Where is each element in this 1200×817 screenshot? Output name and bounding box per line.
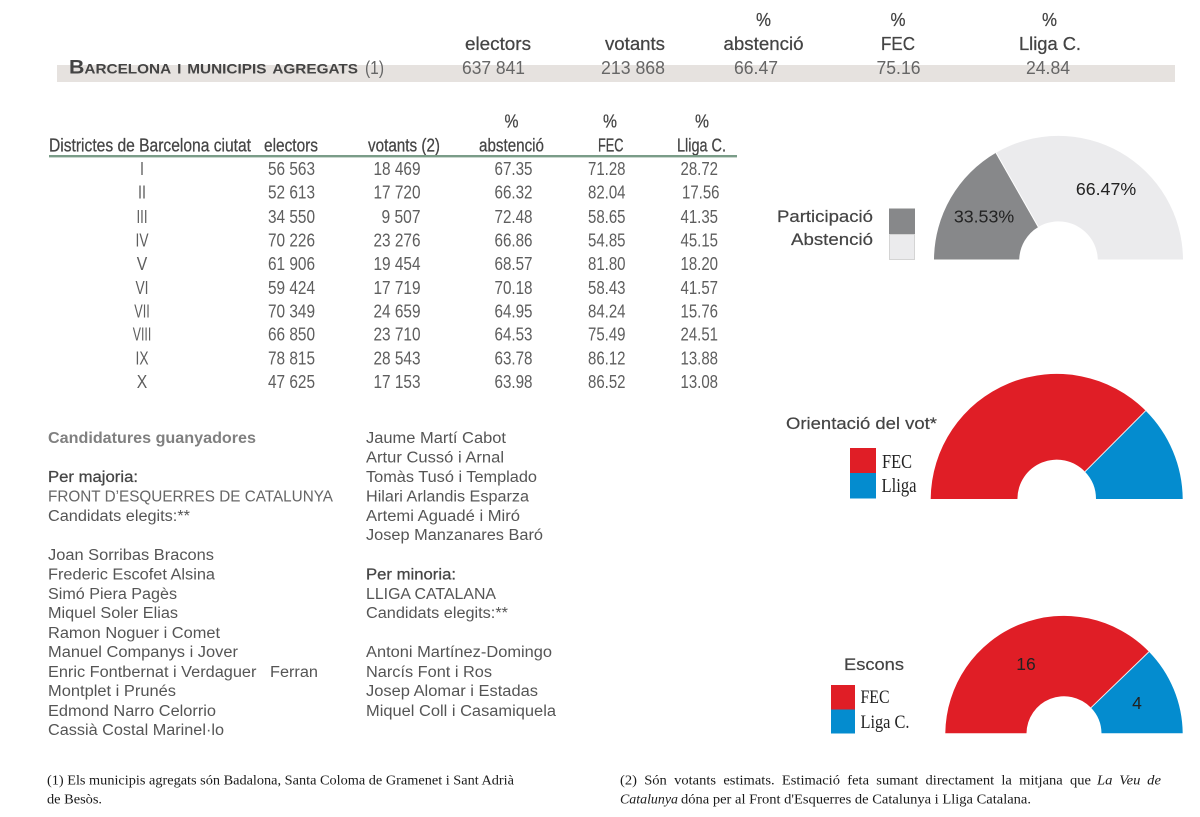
- table rows: II: [138, 182, 146, 202]
- table rows: 67.35: [494, 159, 532, 179]
- table header: votants (2): [368, 136, 440, 156]
- footnote 1: [47, 774, 515, 808]
- text block: winning candidates, right column: Tomàs Tusó i Templado: [366, 469, 537, 486]
- text block: winning candidates, left column: Cassià Costal Marinel·lo: [48, 722, 224, 739]
- table rows: IV: [136, 230, 148, 250]
- table rows: 70 226: [268, 230, 315, 250]
- table rows: 58.43: [588, 278, 626, 298]
- text block: winning candidates, left column: Per majoria:: [48, 469, 138, 486]
- summary header: Lliga C.: [1019, 34, 1081, 54]
- footnote 1: de Besòs.: [47, 792, 102, 808]
- table rows: 9 507: [382, 207, 420, 227]
- chart: vote orientation semi-donut: [931, 374, 1183, 499]
- legend: seats: [831, 655, 910, 734]
- text block: winning candidates, left column: FRONT D’ESQUERRES DE CATALUNYA: [48, 488, 334, 506]
- table rows: 81.80: [588, 254, 626, 274]
- table header: %: [504, 112, 518, 132]
- table rows: 64.53: [494, 325, 532, 345]
- table rows: 56 563: [268, 159, 315, 179]
- table rows: 72.48: [494, 207, 532, 227]
- table rows: 66.32: [494, 182, 532, 202]
- legend: seats: Liga C.: [860, 712, 910, 733]
- table rows: 58.65: [588, 207, 626, 227]
- table rows: 17 153: [374, 372, 420, 392]
- table rows: 17 720: [374, 182, 420, 202]
- text block: winning candidates, right column: Narcís Font i Ros: [366, 664, 492, 681]
- summary header: votants: [605, 34, 665, 54]
- summary title: Barcelona i municipis agregats: [69, 56, 358, 78]
- text block: winning candidates, left column: Frederic Escofet Alsina: [48, 566, 215, 584]
- text block: winning candidates, right column: Jaume Martí Cabot: [366, 430, 507, 447]
- summary header: electors: [465, 34, 531, 54]
- table rows: 28 543: [374, 348, 420, 368]
- table header: %: [603, 112, 617, 132]
- text block: winning candidates, right column: LLIGA CATALANA: [366, 586, 497, 603]
- chart: participation semi-donut: 33.53%: [954, 206, 1014, 226]
- summary header: %: [756, 10, 771, 30]
- text block: winning candidates, left column: Montplet i Prunés: [48, 683, 176, 700]
- chart: participation semi-donut: 66.47%: [1076, 179, 1136, 199]
- table rows: 64.95: [494, 301, 532, 321]
- summary values: 75.16: [876, 58, 920, 78]
- text block: winning candidates, left column: Simó Piera Pagès: [48, 586, 177, 603]
- table rows: 23 710: [374, 325, 420, 345]
- table rows: 78 815: [268, 348, 315, 368]
- text block: winning candidates, right column: [366, 430, 556, 720]
- table rows: 68.57: [494, 254, 532, 274]
- chart: seats semi-donut: 4: [1132, 693, 1142, 713]
- table rows: VI: [136, 278, 148, 298]
- summary header: FEC: [881, 34, 915, 54]
- text block: winning candidates, left column: Joan Sorribas Bracons: [48, 547, 214, 564]
- text block: winning candidates, right column: Miquel Coll i Casamiquela: [366, 703, 556, 720]
- table rows: 84.24: [588, 301, 626, 321]
- table header: electors: [264, 136, 318, 156]
- text block: winning candidates, left column: [48, 430, 334, 739]
- table rows: 18.20: [680, 254, 718, 274]
- text block: winning candidates, right column: Antoni Martínez-Domingo: [366, 644, 552, 661]
- table rows: 23 276: [374, 230, 420, 250]
- table rows: [133, 159, 720, 392]
- legend: seats: FEC: [860, 687, 890, 708]
- table rows: 13.88: [680, 348, 718, 368]
- legend: seats: Escons: [844, 655, 904, 674]
- summary values: 66.47: [734, 58, 778, 78]
- table rows: 63.98: [494, 372, 532, 392]
- table rows: VII: [134, 301, 150, 321]
- panel: Barcelona summary: [57, 10, 1175, 82]
- table rows: 52 613: [268, 182, 315, 202]
- table rows: 17 719: [374, 278, 420, 298]
- chart: participation semi-donut: [934, 136, 1183, 260]
- summary values: (1): [365, 58, 384, 78]
- legend: participation: Participació: [777, 207, 873, 226]
- text block: winning candidates, left column: Ramon Noguer i Comet: [48, 625, 221, 642]
- table rows: 70.18: [494, 278, 532, 298]
- table rows: 63.78: [494, 348, 532, 368]
- summary values: 24.84: [1026, 58, 1070, 78]
- table rows: 13.08: [680, 372, 718, 392]
- footnote 2: dóna per al Front d'Esquerres de Catalunya i Lliga Catalana.: [681, 792, 1031, 808]
- summary header: [465, 10, 1081, 54]
- text block: winning candidates, right column: Hilari Arlandis Esparza: [366, 488, 529, 506]
- table rows: 45.15: [680, 230, 718, 250]
- table rows: 15.76: [680, 301, 718, 321]
- table rows: 54.85: [588, 230, 626, 250]
- text block: winning candidates, right column: Per minoria:: [366, 566, 456, 584]
- summary values: 637 841: [462, 58, 525, 78]
- panel: districts table: [49, 112, 737, 392]
- table rows: 41.35: [680, 207, 718, 227]
- table header: abstenció: [479, 136, 544, 156]
- table rows: 24 659: [374, 301, 420, 321]
- table rows: IX: [136, 348, 148, 368]
- text block: winning candidates, right column: Josep Alomar i Estadas: [366, 683, 538, 700]
- table header: Lliga C.: [677, 136, 726, 156]
- legend: participation: [777, 207, 915, 260]
- table rows: X: [137, 372, 147, 392]
- table rows: 75.49: [588, 325, 626, 345]
- table header: FEC: [598, 136, 624, 156]
- summary header: abstenció: [724, 34, 804, 54]
- text block: winning candidates, right column: Artemi Aguadé i Miró: [366, 508, 520, 525]
- summary header: %: [1042, 10, 1057, 30]
- summary values: [365, 58, 1070, 78]
- table header: %: [695, 112, 709, 132]
- table rows: 71.28: [588, 159, 626, 179]
- table rows: 24.51: [680, 325, 718, 345]
- text block: winning candidates, left column: Edmond Narro Celorrio: [48, 703, 216, 720]
- text block: winning candidates, left column: Candidatures guanyadores: [48, 430, 256, 447]
- table rows: 86.52: [588, 372, 626, 392]
- table rows: 34 550: [268, 207, 315, 227]
- table rows: VIII: [133, 325, 151, 345]
- table rows: III: [136, 207, 148, 227]
- text block: winning candidates, left column: Miquel Soler Elias: [48, 605, 178, 622]
- chart: seats semi-donut: [945, 616, 1183, 733]
- legend: vote orientation: [786, 414, 937, 498]
- text block: winning candidates, right column: Candidats elegits:**: [366, 605, 508, 622]
- table rows: 86.12: [588, 348, 626, 368]
- table rows: 19 454: [374, 254, 420, 274]
- text block: winning candidates, left column: Candidats elegits:**: [48, 508, 190, 525]
- table header: [49, 112, 726, 156]
- table rows: 66 850: [268, 325, 315, 345]
- table rows: 17.56: [682, 182, 720, 202]
- table rows: 47 625: [268, 372, 315, 392]
- footnote 1: (1) Els municipis agregats són Badalona, Santa Coloma de Gramenet i Sant Adrià: [47, 774, 515, 788]
- chart: seats semi-donut: 16: [1016, 654, 1036, 674]
- footnote 2: La Veu de: [1096, 774, 1161, 788]
- summary band: [57, 65, 1175, 82]
- table rows: 61 906: [268, 254, 315, 274]
- table rows: 59 424: [268, 278, 315, 298]
- table rows: 66.86: [494, 230, 532, 250]
- table rows: 18 469: [374, 159, 420, 179]
- table header: Districtes de Barcelona ciutat: [49, 136, 251, 156]
- text block: winning candidates, left column: Enric Fontbernat i Verdaguer Ferran: [48, 664, 318, 681]
- summary header: %: [890, 10, 906, 30]
- table rows: 70 349: [268, 301, 315, 321]
- table rows: V: [137, 254, 147, 274]
- legend: vote orientation: Lliga: [882, 475, 917, 497]
- summary values: 213 868: [601, 58, 665, 78]
- footnote 2: [620, 774, 1161, 808]
- legend: vote orientation: Orientació del vot*: [786, 414, 937, 433]
- legend: vote orientation: FEC: [882, 451, 912, 473]
- footnote 2: Catalunya: [620, 792, 678, 808]
- legend: participation: Abstenció: [791, 230, 873, 249]
- text block: winning candidates, right column: Artur Cussó i Arnal: [366, 450, 504, 466]
- footnote 2: (2) Són votants estimats. Estimació feta sumant directament la mitjana que: [620, 774, 1091, 788]
- table rows: I: [140, 159, 144, 179]
- table rows: 41.57: [680, 278, 718, 298]
- text block: winning candidates, left column: Manuel Companys i Jover: [48, 644, 238, 661]
- table rows: 28.72: [680, 159, 718, 179]
- text block: winning candidates, right column: Josep Manzanares Baró: [366, 527, 543, 544]
- table rows: 82.04: [588, 182, 626, 202]
